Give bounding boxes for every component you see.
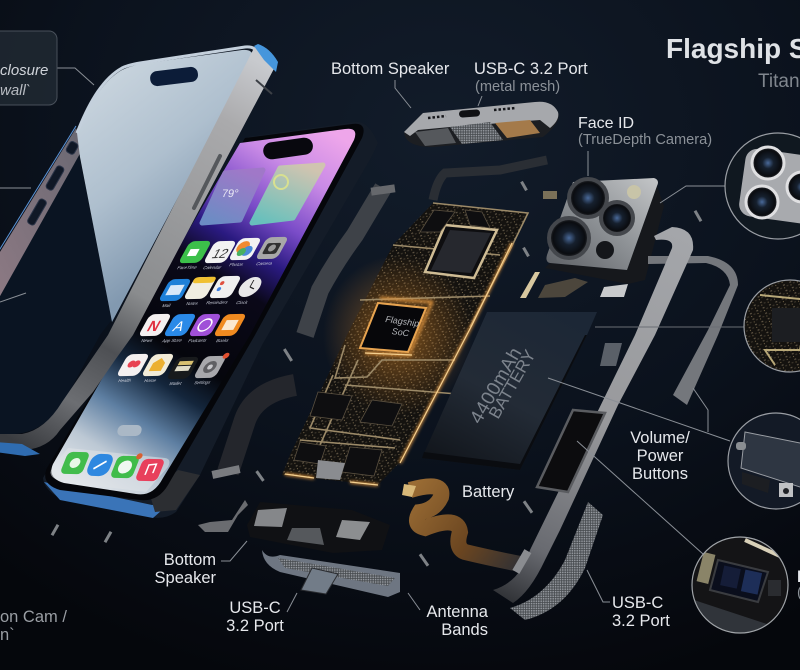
circle ring: board <box>744 280 800 372</box>
app icons <box>112 237 289 387</box>
label: cut-off front camera <box>0 608 67 644</box>
module body <box>262 550 400 597</box>
copper pad <box>495 120 540 138</box>
right rail <box>0 45 277 450</box>
label: Antenna Bands: Antenna <box>427 603 489 621</box>
speaker body <box>247 502 390 553</box>
label: USB-C lower: USB-C <box>229 599 281 617</box>
battery label: 4400mAh <box>466 344 526 428</box>
top flex cable <box>433 160 547 200</box>
label: Face ID: Face ID <box>578 115 634 132</box>
label: cut-off right <box>797 568 800 601</box>
label: USB-C top: (metal mesh) <box>475 79 560 95</box>
flash <box>627 185 641 199</box>
label: Antenna Bands: Bands <box>441 621 488 639</box>
circle ring: camera <box>725 133 800 239</box>
camera module <box>538 178 664 298</box>
widget: weather <box>202 170 263 223</box>
center bracket <box>287 528 324 545</box>
SoC glow <box>323 255 473 415</box>
dark lower glass <box>0 150 135 434</box>
small module <box>537 410 605 492</box>
app icons: Calendar <box>202 265 223 271</box>
black bezel <box>45 124 364 500</box>
bright glass <box>77 50 252 322</box>
label: bottom speaker top: Bottom Speaker <box>331 60 450 78</box>
speaker pad 2 <box>336 520 370 540</box>
label: Volume/Power Buttons: Buttons <box>632 465 688 483</box>
speaker pad 1 <box>254 508 287 527</box>
left flex cable <box>305 188 383 335</box>
callout: enclosure: closure <box>0 62 48 79</box>
frame bottom blue <box>0 442 40 456</box>
left side rail <box>0 128 82 305</box>
copper tab <box>402 484 416 497</box>
board frame traces <box>300 203 528 448</box>
flex connector <box>512 549 531 574</box>
phone: display assembly <box>43 122 378 518</box>
logic board <box>282 203 528 485</box>
camera plate <box>546 178 658 270</box>
label: USB-C top: USB-C 3.2 Port <box>474 60 588 78</box>
label: Bottom Speaker lower: Speaker <box>155 569 216 587</box>
label: Volume/Power Buttons: Power <box>637 447 684 465</box>
widget: weather: 79° <box>221 188 239 200</box>
search pill <box>117 425 142 436</box>
label: Antenna Bands <box>427 603 489 639</box>
phone side shell <box>43 122 378 518</box>
label: Battery: Battery <box>462 483 515 501</box>
right frame rails <box>402 227 738 620</box>
app icons: Health <box>117 378 133 384</box>
app icons: News <box>140 338 154 344</box>
label: cut-off front camera: n` <box>0 626 15 644</box>
upper chip frame <box>425 225 497 278</box>
app icons: Settings <box>193 380 212 386</box>
label: USB-C right: USB-C <box>612 594 663 612</box>
app icons: Mail <box>161 303 172 309</box>
app icons: Podcasts <box>187 338 208 344</box>
label: Volume/Power Buttons <box>630 429 690 483</box>
battery body <box>422 312 597 470</box>
corner band <box>256 80 272 94</box>
blue corner highlight <box>254 44 278 72</box>
battery lower edge <box>422 335 587 470</box>
dynamic island <box>262 137 314 160</box>
board base <box>282 203 528 485</box>
callout: enclosure <box>0 31 57 105</box>
app icons: Wallet <box>168 381 183 387</box>
SoC name: SoC <box>391 326 410 338</box>
flex connector <box>211 465 241 479</box>
battery label line 2: BATTERY <box>485 347 539 422</box>
dock <box>50 448 169 492</box>
app icons: 12 <box>209 246 232 261</box>
port <box>459 109 480 118</box>
mesh antenna <box>510 502 603 620</box>
camera tab <box>600 284 628 297</box>
battery <box>422 312 597 470</box>
inner frame <box>648 256 738 405</box>
app icons: Reminders <box>205 300 230 306</box>
detail circle: board <box>744 280 800 372</box>
app icons: App Store <box>161 338 184 344</box>
camera connector flex <box>538 278 588 298</box>
label: USB-C right <box>612 594 670 630</box>
widget: fitness <box>252 165 323 223</box>
label: Bottom Speaker lower: Bottom <box>164 551 216 569</box>
app icons: Camera <box>255 261 274 267</box>
connector <box>301 568 338 594</box>
glass top rim <box>77 47 256 133</box>
mesh <box>450 122 503 144</box>
lower flex cable <box>228 385 295 472</box>
mesh strip <box>278 558 395 586</box>
subtitle: Titan <box>758 71 800 92</box>
label: cut-off front camera: on Cam / <box>0 608 67 626</box>
small brackets <box>198 191 622 532</box>
dynamic island cutout <box>149 66 199 87</box>
USB socket on board <box>316 460 345 480</box>
lens 1 <box>569 179 607 217</box>
label: Face ID: (TrueDepth Camera) <box>578 132 712 148</box>
circle ring: haptic <box>728 413 800 509</box>
app icons: Notes <box>185 301 200 307</box>
app icons: Clock <box>235 300 249 306</box>
label: USB-C top <box>474 60 588 95</box>
left flex connector <box>371 184 395 196</box>
outer frame <box>493 227 693 603</box>
upper chip <box>431 230 491 273</box>
label: USB-C right: 3.2 Port <box>612 612 670 630</box>
label: Volume/Power Buttons: Volume/ <box>630 429 690 447</box>
label: USB-C lower: 3.2 Port <box>226 617 284 635</box>
app icons: Photos <box>228 262 245 268</box>
glow traces <box>285 243 512 485</box>
side buttons <box>27 140 79 226</box>
bottom speaker <box>247 502 390 553</box>
small chips <box>294 210 490 476</box>
callout lines <box>0 68 745 612</box>
module body <box>404 102 559 147</box>
small screws <box>51 181 702 567</box>
SoC package <box>360 303 426 352</box>
circle ring: front sensor <box>692 537 788 633</box>
bottom USB-C module <box>262 550 400 597</box>
app icons: Books <box>215 338 231 344</box>
copper flex <box>410 486 520 564</box>
speaker holes <box>428 108 516 118</box>
sensor <box>596 241 614 259</box>
lens 3 <box>549 218 589 258</box>
speaker pads <box>415 128 456 146</box>
metal top surface <box>404 102 558 136</box>
bright traces <box>285 243 512 485</box>
bottom edge blue <box>44 482 170 518</box>
callout: enclosure: wall` <box>0 82 31 99</box>
app icons: A <box>170 319 188 335</box>
phone: front glass and titanium frame <box>0 44 278 456</box>
app icons: N <box>144 318 164 335</box>
power button <box>194 156 220 208</box>
label: USB-C lower <box>226 599 284 635</box>
SoC name: Flagship <box>385 314 420 329</box>
label: Bottom Speaker lower <box>155 551 216 587</box>
plate shading <box>545 186 664 284</box>
detail circle: front sensor <box>692 538 788 632</box>
detail circle: camera <box>739 146 800 224</box>
app icons: FaceTime <box>176 265 198 271</box>
top USB-C module <box>404 102 559 147</box>
screen <box>51 129 355 494</box>
rail blue highlight <box>0 126 76 257</box>
app icons: Home <box>143 378 158 384</box>
detail circle: haptic <box>728 413 800 509</box>
label: Face ID <box>578 115 712 148</box>
lens 2 <box>601 202 633 234</box>
corner shade <box>150 470 200 512</box>
